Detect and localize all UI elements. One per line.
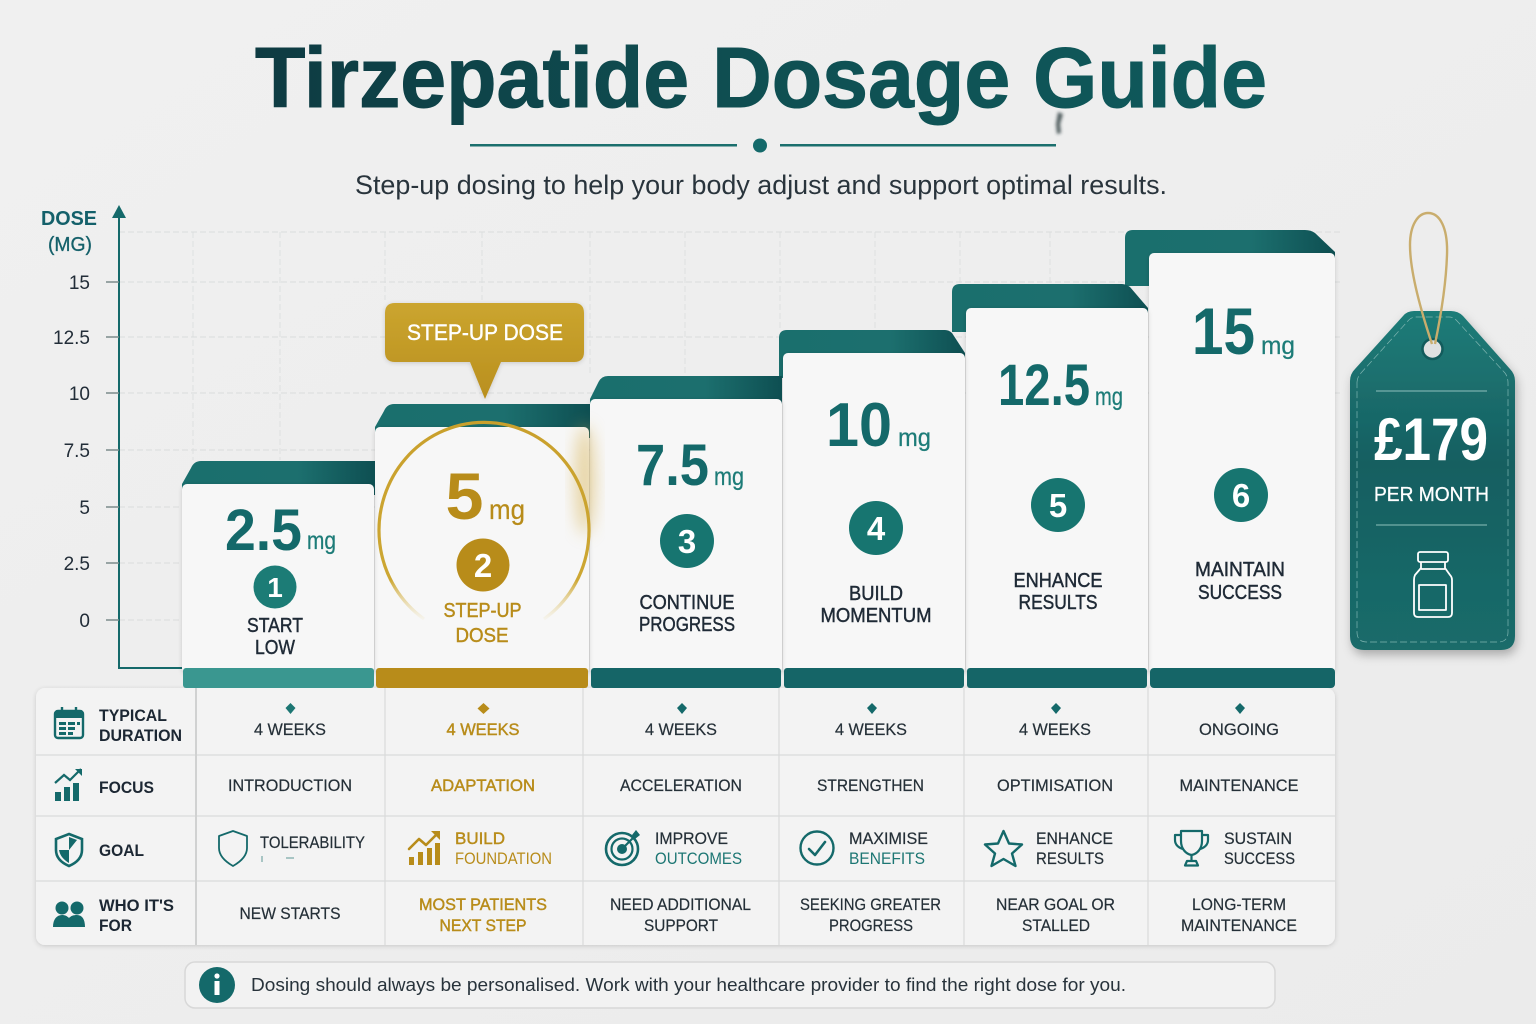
row label [99,706,182,745]
row: focus [55,769,1298,801]
step label [639,592,735,636]
step number [456,538,510,592]
price period: PER MONTH [1374,483,1489,506]
step number: 2 [474,547,492,584]
duration values: 4 WEEKS [1019,720,1091,739]
audience values: PROGRESS [829,916,913,935]
bar 2: 5 mg highlighted [375,404,595,688]
step label [820,583,932,627]
bar 3: 7.5 mg [590,376,782,688]
step number: 3 [678,523,696,560]
step label: LOW [255,637,295,659]
icon: rising chart [55,769,82,801]
dose value: mg [307,527,336,555]
dose value: 12.5 [998,353,1090,418]
goal: build foundation: BUILD [455,829,505,848]
step number [660,514,714,568]
axis tick labels: 10 [69,384,90,405]
focus values: OPTIMISATION [997,776,1113,795]
step label: RESULTS [1018,592,1098,614]
row label: FOR [99,916,132,935]
title divider [470,138,1056,152]
row: typical duration [55,703,1279,745]
step label: PROGRESS [639,614,735,636]
dose value: 2.5 [225,498,302,563]
audience values: NEED ADDITIONAL [610,895,751,914]
focus values [228,776,1298,795]
goal: build foundation [409,829,552,868]
dose value [826,391,931,460]
goal: enhance results: RESULTS [1036,849,1104,868]
goal: maximise benefits [800,829,928,868]
duration values: ONGOING [1199,720,1279,739]
audience values [240,895,1297,935]
bar 1: 2.5 mg [182,461,375,688]
step number: 6 [1232,477,1250,514]
axis tick labels: 0 [79,611,90,632]
axis tick labels: 15 [69,273,90,294]
focus values: ADAPTATION [431,776,535,795]
icon: people [53,902,85,927]
audience values: STALLED [1022,916,1090,935]
audience values: NEXT STEP [440,916,526,935]
goal: tolerability: TOLERABILITY [260,833,365,852]
step number [849,501,903,555]
step number: 1 [267,572,283,603]
row label: WHO IT'S [99,896,174,915]
audience values: NEW STARTS [240,904,340,923]
dose value: 10 [826,391,892,460]
goal: sustain success: SUCCESS [1224,849,1295,868]
glow [575,425,595,535]
step number: 4 [867,510,886,547]
audience values: SUPPORT [644,916,718,935]
audience values: MAINTENANCE [1181,916,1297,935]
note box [185,962,1275,1008]
step label: START [247,615,303,637]
audience values: SEEKING GREATER [800,895,941,914]
step label [1195,559,1285,604]
row label: DURATION [99,726,182,745]
focus values: INTRODUCTION [228,776,352,795]
dose value: mg [489,494,525,525]
stitching [1357,317,1508,642]
price tag [1350,213,1515,650]
note text: Dosing should always be personalised. Work with your healthcare provider to find the right dose for you. [251,974,1126,995]
row label [99,896,174,935]
row: who it's for [53,895,1297,935]
axis tick labels: 5 [79,498,90,519]
tag hole [1422,339,1442,359]
row label: GOAL [99,841,144,860]
goal: maximise benefits: BENEFITS [849,849,925,868]
callout: step-up dose: STEP-UP DOSE [407,320,563,345]
goal: enhance results: ENHANCE [1036,829,1113,848]
goal: improve outcomes: IMPROVE [655,829,728,848]
goal: sustain success [1175,829,1295,868]
y axis [41,205,182,668]
dose value: mg [1261,332,1295,360]
step label: ENHANCE [1014,570,1102,592]
callout: step-up dose [385,303,584,399]
dose value: mg [714,463,744,491]
focus values: ACCELERATION [620,776,742,795]
goal: tolerability [219,831,365,866]
duration values [254,703,1279,739]
axis tick labels: 12.5 [53,328,90,349]
step label: DOSE [456,625,508,647]
axis title: DOSE [41,207,97,230]
step label [444,600,522,647]
step number [1214,468,1268,522]
bar 5: 12.5 mg [952,284,1148,688]
row label: FOCUS [99,778,154,797]
row label: TYPICAL [99,706,167,725]
dividers [1376,391,1487,525]
bar 6: 15 mg [1125,230,1335,688]
row: goal [56,829,1295,868]
audience values: NEAR GOAL OR [996,895,1115,914]
goal: improve outcomes: OUTCOMES [655,849,742,868]
axis tick labels [53,273,90,632]
bar 4: 10 mg [779,330,965,688]
audience values: MOST PATIENTS [419,895,547,914]
icon: shield [56,834,82,866]
subtitle: Step-up dosing to help your body adjust and support optimal results. [355,170,1167,200]
goal: improve outcomes [606,829,742,868]
tag body [1350,311,1515,650]
title: Tirzepatide Dosage Guide [255,31,1267,126]
goal: maximise benefits: MAXIMISE [849,829,928,848]
dose value: 5 [446,459,484,533]
axis tick labels: 2.5 [64,554,90,575]
dose value: 7.5 [636,433,709,498]
icon: info [199,967,235,1003]
goal: sustain success: SUSTAIN [1224,829,1292,848]
step number [1031,478,1085,532]
goal: build foundation: FOUNDATION [455,849,552,868]
axis unit: (MG) [48,234,92,256]
icon: calendar [55,707,83,738]
step label: CONTINUE [640,592,734,614]
price: £179 [1374,406,1488,473]
gold ring [379,422,589,619]
step label: SUCCESS [1198,582,1282,604]
table [36,688,1335,945]
focus values: MAINTENANCE [1180,776,1298,795]
axis tick labels: 7.5 [64,441,90,462]
step label [1014,570,1102,614]
step label: STEP-UP [444,600,522,622]
duration values: 4 WEEKS [645,720,717,739]
step label: MOMENTUM [820,605,932,627]
goal: enhance results [985,829,1113,868]
audience values: LONG-TERM [1192,895,1286,914]
duration values: 4 WEEKS [446,720,520,739]
duration values: 4 WEEKS [254,720,326,739]
icon: vial [1414,552,1452,617]
focus values: STRENGTHEN [817,776,924,795]
step label [247,615,303,659]
step number: 5 [1049,487,1067,524]
dose value: mg [898,424,931,452]
duration values: 4 WEEKS [835,720,907,739]
step number [254,566,296,608]
dose value [446,459,525,533]
dose value: mg [1095,383,1123,411]
gold string [1410,213,1447,344]
step label: BUILD [849,583,903,605]
dose value: 15 [1192,294,1255,368]
step label: MAINTAIN [1195,559,1285,581]
